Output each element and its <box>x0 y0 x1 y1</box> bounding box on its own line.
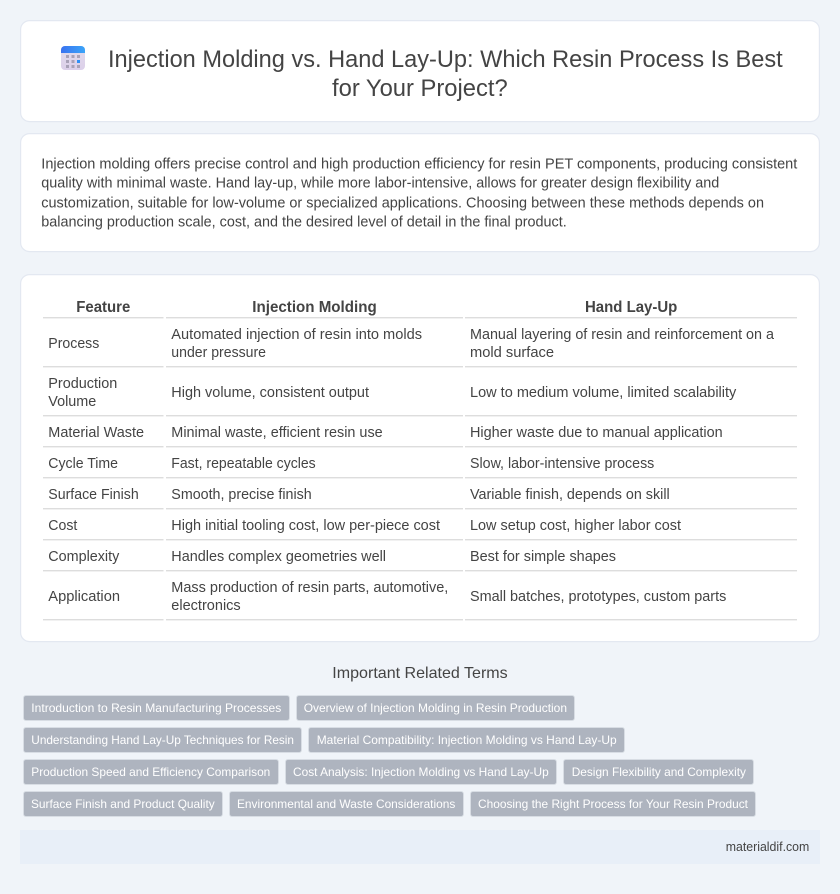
row: production volume: Production <box>48 376 117 392</box>
intro text: customization, suitable for low-volume or specialized applications. Choosing between these methods depends on <box>41 195 764 211</box>
row: cost <box>48 518 681 534</box>
related terms tags <box>24 696 756 816</box>
row: application <box>48 580 726 614</box>
panel: header <box>21 21 819 122</box>
table header row: Injection Molding <box>252 299 377 316</box>
row: cost: Low setup cost, higher labor cost <box>470 518 681 534</box>
row: production volume: High volume, consistent output <box>171 385 369 401</box>
row: process: Automated injection of resin into molds <box>171 327 422 343</box>
title <box>108 46 783 102</box>
row: production volume: Low to medium volume, limited scalability <box>470 385 737 401</box>
row: process: Process <box>48 336 99 352</box>
panel: introduction <box>21 134 819 252</box>
tag: Environmental and Waste Considerations <box>237 797 455 811</box>
row: application: Small batches, prototypes, custom parts <box>470 589 726 605</box>
row: complexity: Best for simple shapes <box>470 549 616 565</box>
row: complexity: Complexity <box>48 549 120 565</box>
row: process: mold surface <box>470 345 554 361</box>
tag <box>24 696 290 720</box>
row: cycle time: Slow, labor-intensive process <box>470 456 654 472</box>
row: production volume <box>48 376 737 410</box>
tag: Introduction to Resin Manufacturing Processes <box>31 701 281 715</box>
row: complexity <box>48 549 616 565</box>
row: application: Mass production of resin parts, automotive, <box>171 580 448 596</box>
row: complexity: Handles complex geometries well <box>171 549 386 565</box>
row: cycle time <box>48 456 654 472</box>
row: process: Manual layering of resin and reinforcement on a <box>470 327 774 343</box>
tag <box>230 792 464 816</box>
table header row: Feature <box>76 299 131 316</box>
intro text <box>41 156 797 230</box>
tag <box>470 792 756 816</box>
panel: comparison table <box>21 275 819 642</box>
row: surface finish: Surface Finish <box>48 487 139 503</box>
footer: materialdif.com <box>726 840 809 854</box>
heading: related terms: Important Related Terms <box>332 665 508 682</box>
row: material waste: Material Waste <box>48 425 144 441</box>
tag: Surface Finish and Product Quality <box>31 797 215 811</box>
table header row <box>76 299 677 316</box>
title: Injection Molding vs. Hand Lay-Up: Which Resin Process Is Best <box>108 46 783 73</box>
tag <box>24 728 302 752</box>
tag <box>24 760 278 784</box>
tag <box>296 696 574 720</box>
row: application: electronics <box>171 598 241 614</box>
tag: Choosing the Right Process for Your Resin Product <box>478 797 749 811</box>
row: material waste <box>48 425 723 441</box>
row: cycle time: Cycle Time <box>48 456 118 472</box>
row: process: under pressure <box>171 345 266 361</box>
row: surface finish <box>48 487 670 503</box>
row: production volume: Volume <box>48 394 96 410</box>
tag <box>564 760 754 784</box>
tag <box>286 760 556 784</box>
tag: Understanding Hand Lay-Up Techniques for Resin <box>31 733 294 747</box>
tag <box>24 792 222 816</box>
tag <box>308 728 624 752</box>
tag: Cost Analysis: Injection Molding vs Hand Lay-Up <box>293 765 549 779</box>
intro text: balancing production scale, cost, and the desired level of detail in the final product. <box>41 214 567 230</box>
title: for Your Project? <box>332 75 508 102</box>
row: cost: Cost <box>48 518 77 534</box>
row: cycle time: Fast, repeatable cycles <box>171 456 316 472</box>
icon: calendar <box>61 46 85 70</box>
row: surface finish: Smooth, precise finish <box>171 487 312 503</box>
row: material waste: Higher waste due to manual application <box>470 425 723 441</box>
tag: Design Flexibility and Complexity <box>572 765 746 779</box>
tag: Production Speed and Efficiency Comparison <box>31 765 270 779</box>
row: application: Application <box>48 589 120 605</box>
intro text: Injection molding offers precise control and high production efficiency for resin PET components, producing consistent <box>41 156 797 172</box>
row: cost: High initial tooling cost, low per-piece cost <box>171 518 440 534</box>
row: material waste: Minimal waste, efficient resin use <box>171 425 383 441</box>
intro text: quality with minimal waste. Hand lay-up, while more labor-intensive, allows for greater design flexibility and <box>41 175 719 191</box>
row: surface finish: Variable finish, depends on skill <box>470 487 670 503</box>
tag: Material Compatibility: Injection Molding vs Hand Lay-Up <box>317 733 617 747</box>
footer <box>20 830 820 864</box>
tag: Overview of Injection Molding in Resin Production <box>304 701 567 715</box>
row: process <box>48 327 774 361</box>
table header row: Hand Lay-Up <box>585 299 677 316</box>
